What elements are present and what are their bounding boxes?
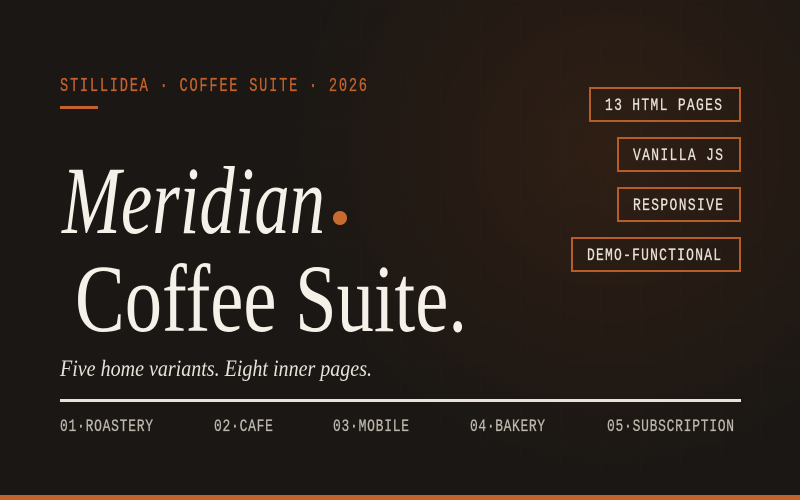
title line: Coffee Suite: Coffee Suite. (75, 245, 467, 352)
tags (572, 88, 740, 271)
variant: mobile: 03·MOBILE (333, 416, 409, 437)
variant: bakery: 04·BAKERY (470, 416, 546, 437)
tag: responsive (618, 188, 740, 221)
bottom accent bar (0, 495, 800, 500)
tag: 13 HTML pages: 13 HTML PAGES (605, 95, 722, 116)
tag: demo-functional: DEMO-FUNCTIONAL (587, 245, 721, 266)
title (61, 147, 467, 352)
variant: subscription: 05·SUBSCRIPTION (607, 416, 734, 437)
title line: Meridian: Meridian (61, 147, 325, 254)
variant: cafe: 02·CAFE (214, 416, 273, 437)
title accent dot (333, 211, 347, 225)
tag: 13 HTML pages (590, 88, 740, 121)
variant list (60, 416, 734, 437)
tag: vanilla JS: VANILLA JS (633, 145, 723, 166)
eyebrow text: STILLIDEA · COFFEE SUITE · 2026 (60, 75, 367, 97)
subtitle: Five home variants. Eight inner pages. (59, 356, 372, 381)
tag: demo-functional (572, 238, 740, 271)
eyebrow accent rule (60, 106, 98, 109)
tag: vanilla JS (618, 138, 740, 171)
tag: responsive: RESPONSIVE (633, 195, 723, 216)
divider line (60, 399, 741, 402)
variant: roastery: 01·ROASTERY (60, 416, 154, 437)
